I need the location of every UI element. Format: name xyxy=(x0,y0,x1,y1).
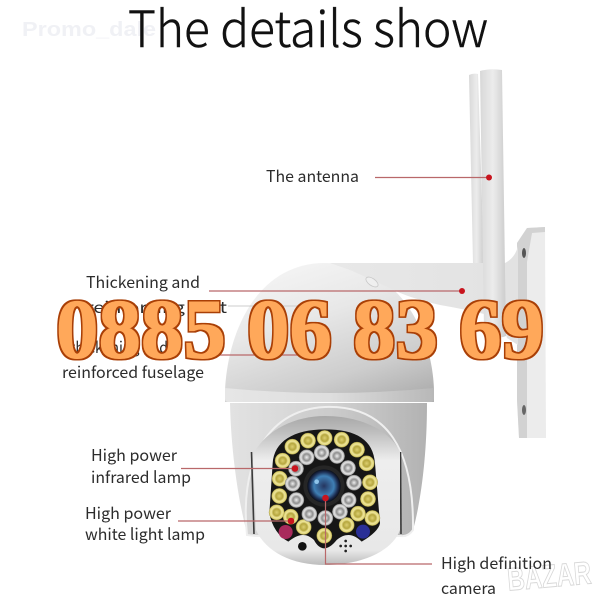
callout: high power white light lamp: High power xyxy=(85,500,172,524)
callout: thickening and reinforced fuselage: reinforced fuselage xyxy=(62,359,204,383)
white LEDs xyxy=(285,445,362,526)
callout: the antenna xyxy=(266,163,492,187)
arm joint xyxy=(364,275,380,289)
callout: high definition camera xyxy=(322,495,552,599)
right slit xyxy=(400,452,402,534)
callout: high power infrared lamp: High power xyxy=(91,442,178,466)
blue indicator LED xyxy=(356,525,370,539)
face plate xyxy=(253,416,400,565)
bracket screw bottom xyxy=(522,405,526,415)
watermark: Promo_dale: Promo_dale xyxy=(22,19,156,41)
left slit xyxy=(252,452,254,534)
callout: high definition camera: High definition xyxy=(441,550,552,574)
dome xyxy=(225,263,434,402)
callout: thickening and reinforced fuselage xyxy=(62,334,300,383)
callout: high power infrared lamp xyxy=(91,442,298,488)
back antenna xyxy=(469,74,484,264)
speaker holes xyxy=(339,540,352,552)
inner shell arch xyxy=(246,407,413,536)
panel xyxy=(269,429,380,548)
mounting arm xyxy=(330,246,518,345)
yellow LEDs xyxy=(269,430,380,543)
callout: thickening and reinforcing part xyxy=(86,269,465,318)
lower housing xyxy=(230,403,427,536)
callout: thickening and reinforcing part: reinforcing part xyxy=(86,294,227,318)
camera illustration xyxy=(225,69,546,565)
front antenna xyxy=(480,69,506,337)
lens xyxy=(303,465,345,507)
callout: high power white light lamp: white light lamp xyxy=(85,521,205,545)
callout: high power infrared lamp: infrared lamp xyxy=(91,464,191,488)
dome rim xyxy=(225,388,434,402)
LED panel and lens xyxy=(269,429,380,552)
phone number overlay: 0885 06 83 69 xyxy=(56,282,544,376)
callout: thickening and reinforced fuselage: thickening and xyxy=(70,334,168,358)
pink indicator LED xyxy=(279,525,293,539)
callout: the antenna: The antenna xyxy=(266,163,359,187)
bracket shading xyxy=(517,227,545,438)
callout: thickening and reinforcing part: Thickening and xyxy=(86,269,200,293)
callout: high power white light lamp xyxy=(85,500,294,545)
wall bracket xyxy=(517,227,546,438)
bracket screw top xyxy=(522,248,526,258)
callout: high definition camera: camera xyxy=(441,575,496,599)
light sensor xyxy=(298,542,307,551)
